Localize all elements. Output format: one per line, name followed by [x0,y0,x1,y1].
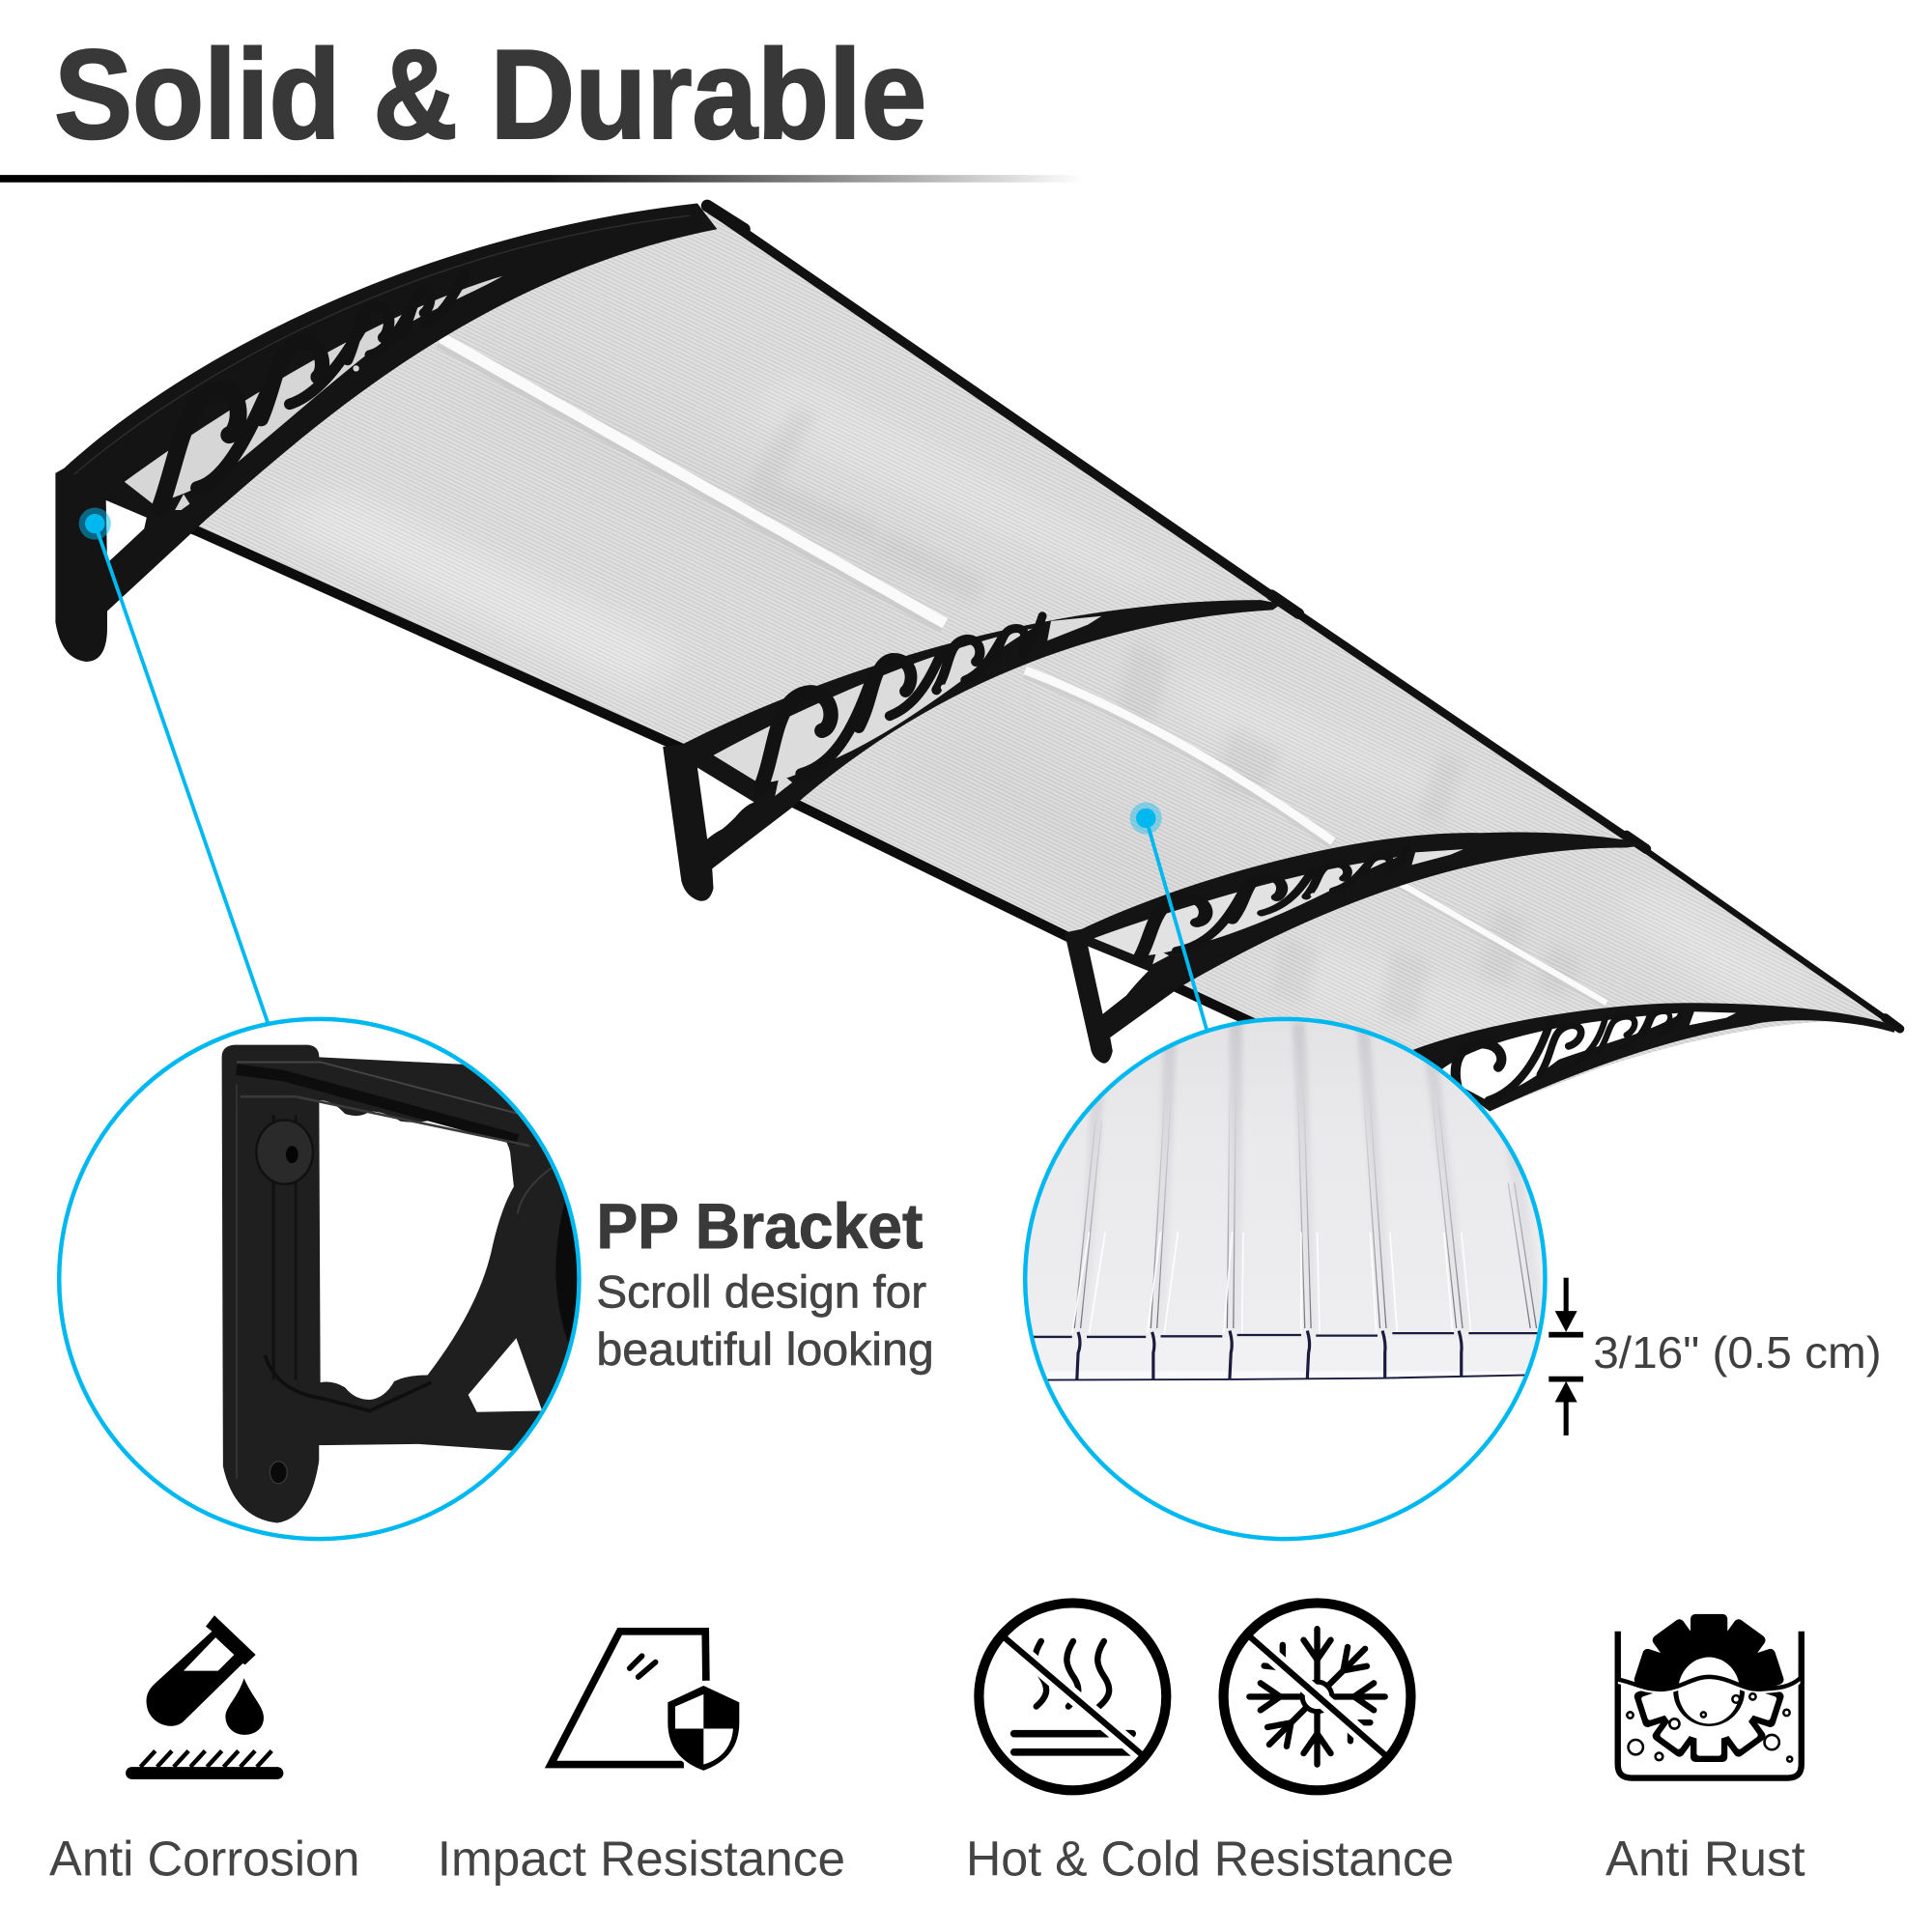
front rail [106,494,1460,1119]
canopy panel [199,213,1884,1110]
rib and bracket 1 [55,203,717,662]
callout line: panel [1146,818,1208,1033]
back top rail [707,206,1900,1029]
sheet rib bands [1086,1022,1530,1262]
icon: anti corrosion [126,1615,283,1779]
label: Impact Resistance: Impact Resistance [438,1831,845,1886]
rib and bracket 2 [663,600,1282,901]
title underline [0,175,1084,183]
text: scroll design line 2: beautiful looking [596,1324,934,1376]
bracket close-up image [222,1045,591,1552]
rib 4 [1413,1003,1897,1112]
thickness label: 3/16" (0.5 cm) [1593,1327,1882,1378]
callout dot: bracket [79,508,111,540]
panel light stripes [440,337,1606,1005]
label: Anti Rust: Anti Rust [1605,1831,1805,1886]
label: Hot and Cold Resistance: Hot & Cold Resistance [966,1831,1454,1886]
callout line: bracket [95,524,269,1025]
sheet ridge lines [1074,1084,1537,1328]
icon: impact resistance [551,1632,741,1772]
thickness dimension arrows [1548,1278,1583,1435]
rib 1 scrollwork [125,273,502,510]
sheet cross-section lines [1030,1331,1540,1380]
text: scroll design line 1: Scroll design for [596,1266,926,1318]
icon: cold resistance [1224,1603,1410,1790]
icon: anti rust [1618,1614,1802,1778]
label: Anti Corrosion: Anti Corrosion [49,1831,359,1886]
canopy product image [55,185,1922,1133]
sheet close-up image [1028,1021,1544,1381]
heading: PP Bracket: PP Bracket [596,1191,923,1263]
icon: heat resistance [979,1603,1166,1790]
panel: polycarbonate sheet close-up circle [1010,1010,1565,1539]
rib and bracket 3 [1065,832,1645,1064]
title: Solid & Durable [54,23,926,165]
panel: bracket close-up circle [59,1019,591,1552]
callout dot: panel [1130,802,1162,835]
